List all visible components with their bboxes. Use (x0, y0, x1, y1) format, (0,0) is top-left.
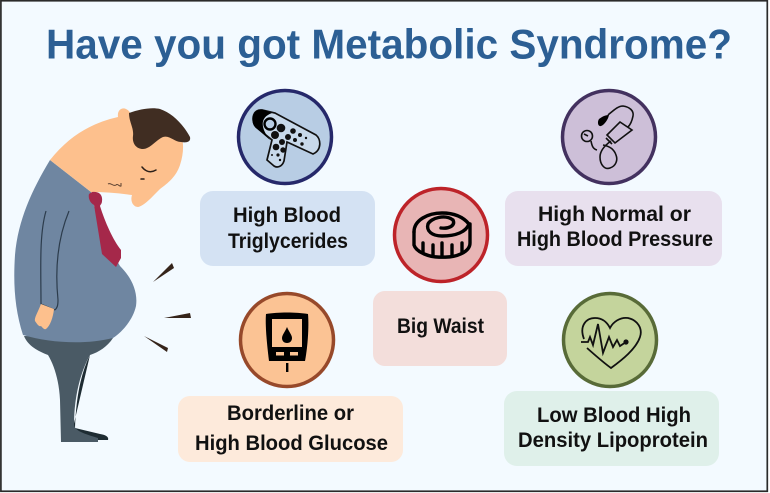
pain marks (144, 263, 191, 352)
label text: Big Waist (397, 315, 484, 338)
panel: borderline or high blood glucose (178, 396, 403, 462)
closed eye (141, 167, 156, 179)
hand (35, 304, 54, 329)
panel: high normal or high blood pressure (505, 191, 722, 266)
sleeve lines (41, 211, 69, 310)
label box (373, 291, 507, 366)
icon: blood pressure cuff (562, 90, 656, 184)
icon: heart with heartbeat line (564, 294, 656, 386)
label box (178, 396, 403, 462)
panel: high normal or high blood pressure: High Blood Pressure (517, 228, 713, 251)
icon: blood glucose meter (240, 294, 334, 386)
icon: blood vessel with fat deposits (238, 90, 332, 184)
head and ear (50, 108, 183, 207)
illustration: worried man looking at his belly (14, 108, 191, 442)
label box (504, 391, 719, 466)
label text: Low Blood High (537, 404, 691, 427)
label text: High Blood (233, 204, 341, 227)
torso and belly (14, 160, 136, 342)
title: Have you got Metabolic Syndrome? (46, 20, 732, 68)
panel: big waist (373, 291, 507, 366)
legs (24, 336, 113, 442)
panel: low blood high density lipoprotein: Density Lipoprotein (518, 429, 708, 452)
label text: High Normal or (538, 203, 691, 226)
icon: measuring tape (394, 188, 488, 282)
panel: low blood high density lipoprotein (504, 391, 719, 466)
panel: high blood triglycerides (200, 191, 375, 266)
label text: Borderline or (227, 402, 354, 425)
label box (200, 191, 375, 266)
label box (505, 191, 722, 266)
tie (89, 192, 121, 267)
panel: borderline or high blood glucose: High Blood Glucose (195, 432, 388, 455)
hair (129, 108, 190, 149)
panel: high blood triglycerides: Triglycerides (228, 230, 348, 253)
mouth (108, 183, 121, 186)
